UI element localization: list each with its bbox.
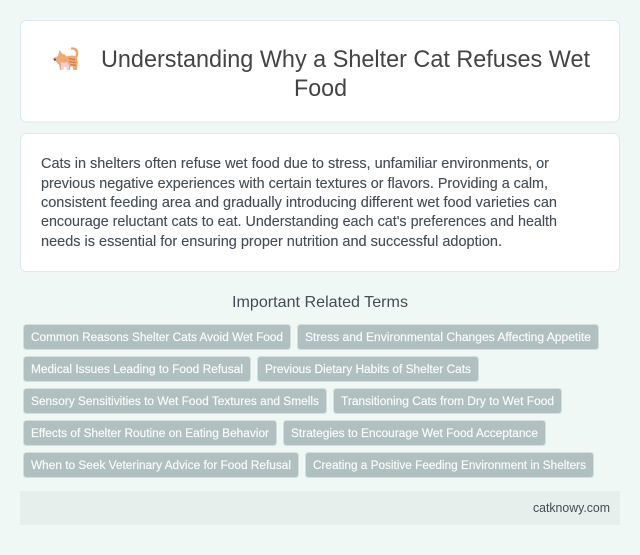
tag: [284, 420, 546, 446]
description text: previous negative experiences with certain textures or flavors. Providing a calm,: [41, 176, 548, 192]
tag: [306, 452, 594, 478]
heading: related terms: Important Related Terms: [232, 294, 408, 311]
title: [101, 46, 590, 102]
tag: Strategies to Encourage Wet Food Acceptance: [291, 426, 538, 440]
tag: [24, 388, 326, 414]
tag: Medical Issues Leading to Food Refusal: [31, 362, 243, 376]
footer source text: catknowy.com: [533, 501, 610, 515]
tag: Transitioning Cats from Dry to Wet Food: [341, 394, 554, 408]
tag: [258, 356, 478, 382]
tag: Stress and Environmental Changes Affecting Appetite: [305, 330, 591, 344]
tag: Previous Dietary Habits of Shelter Cats: [265, 362, 471, 376]
description text: encourage reluctant cats to eat. Understanding each cat's preferences and health: [41, 214, 557, 230]
tag: Common Reasons Shelter Cats Avoid Wet Food: [31, 330, 283, 344]
description text: [41, 156, 557, 250]
title: Food: [294, 75, 347, 102]
tag: Sensory Sensitivities to Wet Food Textures and Smells: [31, 394, 319, 408]
panel: description: [20, 134, 620, 272]
tag group: related terms: [24, 324, 598, 478]
description text: Cats in shelters often refuse wet food due to stress, unfamiliar environments, or: [41, 156, 549, 172]
panel: title card: [20, 20, 620, 122]
icon: cat: [52, 47, 78, 70]
footer: [20, 491, 620, 525]
tag: [298, 324, 598, 350]
title: Understanding Why a Shelter Cat Refuses Wet: [101, 46, 590, 73]
description text: needs is essential for ensuring proper nutrition and successful adoption.: [41, 234, 502, 250]
description text: consistent feeding area and gradually introducing different wet food varieties can: [41, 195, 557, 211]
tag: [24, 420, 276, 446]
tag: Creating a Positive Feeding Environment in Shelters: [313, 458, 586, 472]
tag: Effects of Shelter Routine on Eating Behavior: [31, 426, 269, 440]
tag: [24, 356, 250, 382]
tag: [24, 452, 298, 478]
tag: [24, 324, 290, 350]
tag: When to Seek Veterinary Advice for Food Refusal: [31, 458, 291, 472]
tag: [334, 388, 562, 414]
